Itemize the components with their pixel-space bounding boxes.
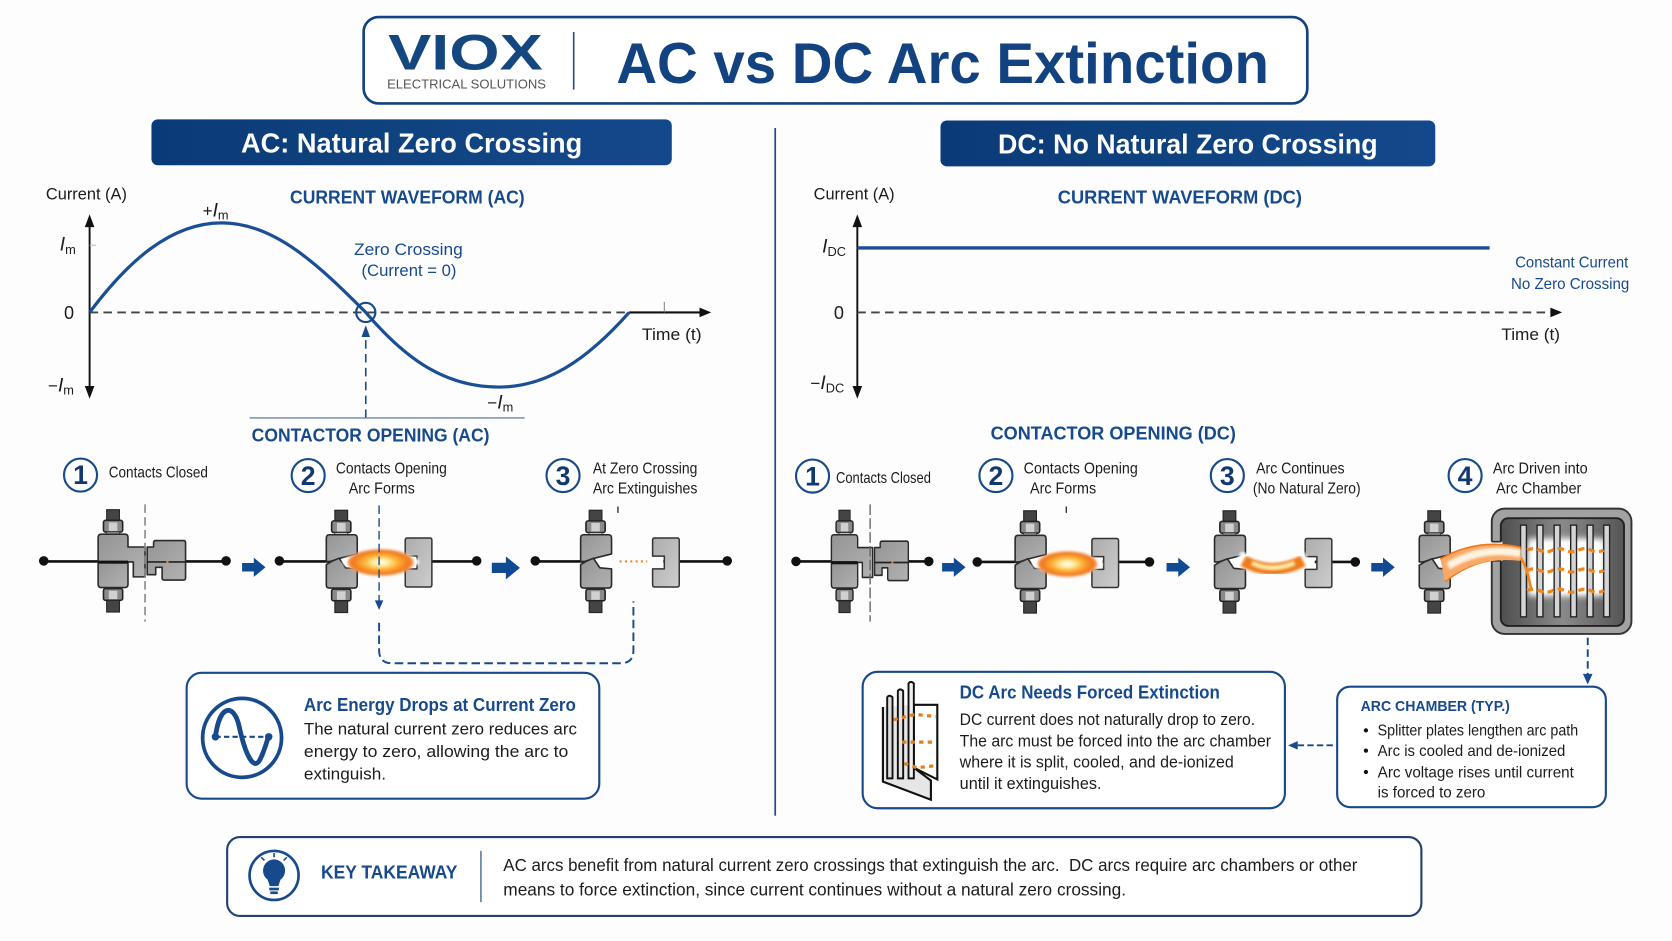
callout: DC forced extinction: DC Arc Needs Forced Extinction [960,682,1220,702]
DC step 4: arc driven into arc chamber [1419,459,1631,634]
dashed arrow to DC callout [1288,741,1333,750]
constant current line [857,246,1490,250]
chart: AC current waveform: m [218,208,229,223]
icon: splitter plates [883,682,937,800]
callout: AC arc energy: Arc Energy Drops at Current Zero [304,695,576,715]
logo: VIOX [387,24,546,92]
heading: AC [151,119,672,165]
DC contactor sequence [791,422,1631,685]
logo: VIOX: ELECTRICAL SOLUTIONS [387,77,546,92]
DC step 3: arc continues: 3 [1220,461,1235,491]
DC step 3: arc continues: (No Natural Zero) [1253,481,1361,498]
zero crossing marker [356,303,375,322]
sine wave [90,223,629,387]
callout: arc chamber: ARC CHAMBER (TYP.) [1361,698,1510,715]
DC step 3: arc continues: Arc Continues [1256,460,1345,477]
DC step 4: arc driven into arc chamber: 4 [1458,461,1473,491]
chart: AC current waveform: −I [48,375,63,396]
arc chamber [1441,509,1631,634]
bullet list: Splitter plates lengthen arc path [1378,723,1578,740]
body text: DC current does not naturally drop to zero. [960,710,1255,729]
arrow [1371,558,1395,577]
chart: AC current waveform [46,184,711,418]
bullet list [1364,723,1578,802]
icon: sine wave in circle [203,698,282,777]
heading: DC: DC: No Natural Zero Crossing [998,129,1378,160]
constant current label: No Zero Crossing [1511,276,1629,293]
body text: where it is split, cooled, and de-ionized [959,753,1234,772]
title text: AC vs DC Arc Extinction [616,32,1269,96]
chart: DC current waveform: DC [826,380,844,395]
DC step 4: arc driven into arc chamber: Arc Driven into [1493,460,1588,477]
DC step 1: contacts closed [791,460,934,622]
DC step 2: arc forms: 2 [989,461,1003,491]
callout: arc chamber [1337,687,1606,807]
arrow [942,558,966,577]
heading: DC [940,120,1435,166]
chart: DC current waveform: 0 [834,303,844,323]
arrow [492,556,520,579]
DC step 3: arc continues [1211,459,1361,613]
zero crossing label [354,240,463,280]
chart: AC current waveform: Time (t) [642,325,702,344]
chart: AC current waveform: m [63,383,74,398]
chart: DC current waveform: −I [810,373,826,394]
AC step 1: contacts closed: Contacts Closed [109,465,208,482]
body text: extinguish. [304,764,386,783]
body text: until it extinguishes. [960,774,1102,793]
DC step 1: contacts closed: Contacts Closed [836,470,931,487]
AC step 3: arc extinguishes: At Zero Crossing [593,460,697,477]
DC step 1: contacts closed: 1 [805,462,820,492]
AC step 3: arc extinguishes: 3 [556,461,570,491]
takeaway text: means to force extinction, since current continues without a natural zero crossing. [503,880,1126,900]
chart: AC current waveform: CURRENT WAVEFORM (AC) [290,188,525,208]
chart: AC current waveform: 0 [64,303,74,323]
chart: AC current waveform: m [65,242,76,257]
AC step 2: arc forms [275,459,481,613]
body text [304,720,577,783]
AC step 3: arc extinguishes: Arc Extinguishes [593,481,698,498]
takeaway text [503,855,1358,900]
bullet list: Arc is cooled and de-ionized [1378,743,1565,760]
dashed connector [379,601,633,663]
AC step 3: arc extinguishes [531,459,732,613]
AC step 1: contacts closed [39,459,231,622]
DC step 4: arc driven into arc chamber: Arc Chamber [1496,481,1581,498]
takeaway text: AC arcs benefit from natural current zero crossings that extinguish the arc. DC arcs require arc chambers or other [503,855,1358,875]
zero crossing label: (Current = 0) [362,261,456,280]
arrow [242,558,266,577]
chart: DC current waveform: Time (t) [1501,325,1560,344]
chart: AC current waveform: Current (A) [46,184,127,203]
bullet list: Arc voltage rises until current [1378,764,1575,781]
arrow [1167,558,1190,577]
constant current label: Constant Current [1515,255,1629,272]
dashed arrow to arc chamber box [1583,638,1593,685]
zero crossing label: Zero Crossing [354,240,463,259]
chart: DC current waveform: CURRENT WAVEFORM (DC) [1058,188,1302,208]
AC step 2: arc forms: 2 [301,461,316,491]
icon: light bulb [250,851,299,900]
DC contactor sequence: CONTACTOR OPENING (DC) [991,422,1236,443]
key takeaway: KEY TAKEAWAY [321,862,458,883]
chart: AC current waveform: I [60,235,66,256]
chart: AC current waveform: +I [203,200,218,221]
DC step 2: arc forms [972,459,1154,613]
chart: AC current waveform: −I [487,392,503,413]
callout: DC forced extinction [863,672,1285,808]
chart: DC current waveform: Current (A) [814,184,895,203]
body text: energy to zero, allowing the arc to [304,742,568,761]
DC step 2: arc forms: Arc Forms [1030,481,1096,498]
body text: The natural current zero reduces arc [304,720,577,739]
chart: AC current waveform: m [503,400,513,415]
title banner [364,17,1307,103]
AC step 2: arc forms: Contacts Opening [336,460,447,477]
chart: DC current waveform: DC [827,244,846,259]
callout: AC arc energy [187,673,599,799]
body text: The arc must be forced into the arc chamber [960,731,1271,750]
AC step 2: arc forms: Arc Forms [349,481,415,498]
bullet list: is forced to zero [1378,785,1485,802]
logo: VIOX: VIOX [388,24,543,80]
chart: DC current waveform [810,184,1629,399]
AC contactor sequence [39,424,732,663]
key takeaway [227,837,1421,916]
body text [959,710,1271,793]
constant current label [1511,255,1629,293]
DC step 2: arc forms: Contacts Opening [1024,460,1138,477]
AC contactor sequence: CONTACTOR OPENING (AC) [252,424,489,445]
chart: DC current waveform: I [822,237,828,258]
heading: AC: AC: Natural Zero Crossing [241,127,582,158]
AC step 1: contacts closed: 1 [73,460,88,490]
